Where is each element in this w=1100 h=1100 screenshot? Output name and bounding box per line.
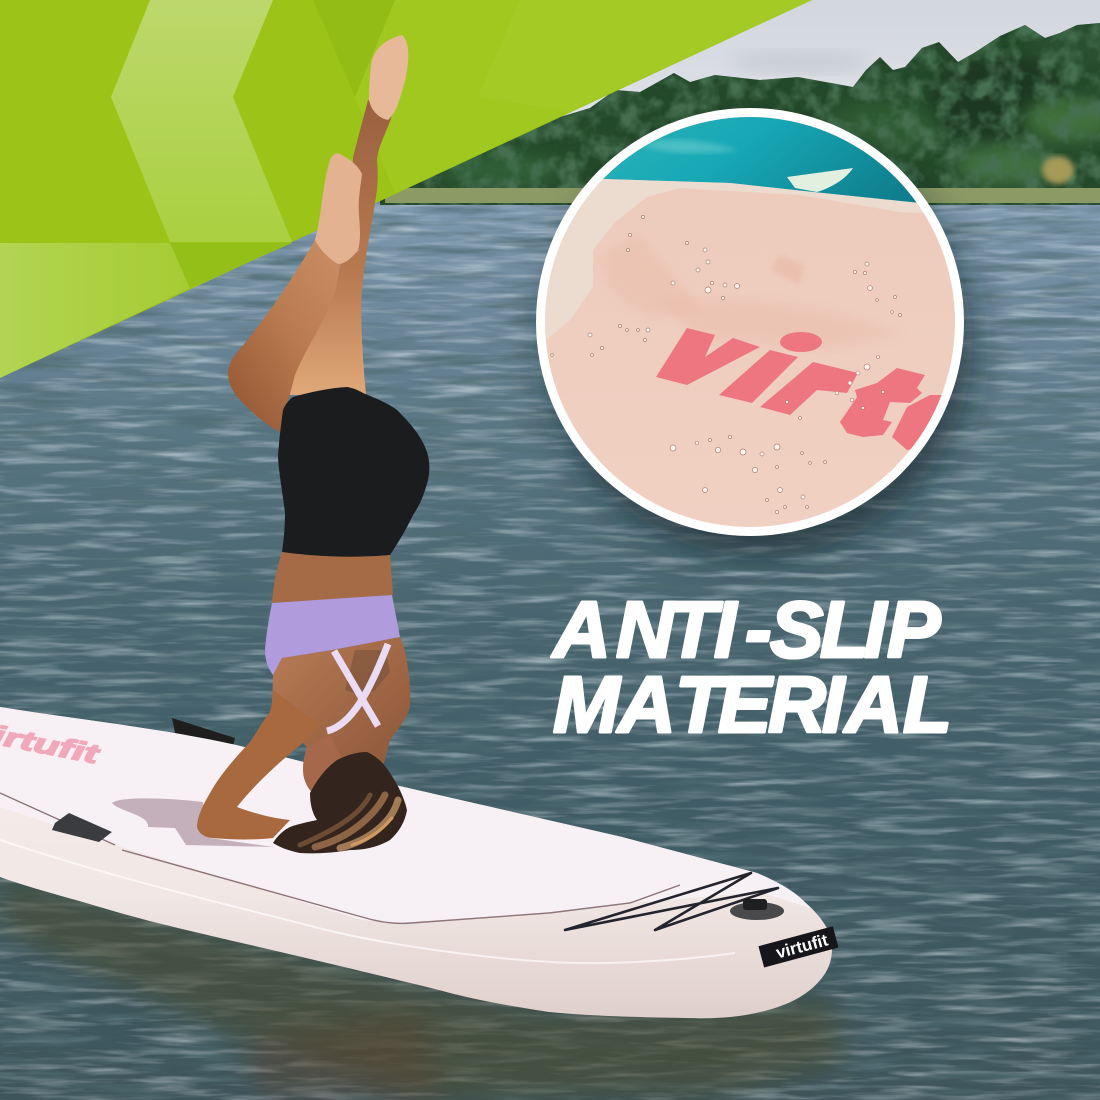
- back and shoulders: [272, 637, 410, 772]
- white cross straps: [327, 644, 388, 731]
- wet darker patches: [606, 240, 685, 316]
- droplets on logo: [786, 356, 884, 420]
- magnified material detail circle: [530, 100, 970, 550]
- green chevron banner: [0, 0, 812, 378]
- person shadow on deck: [112, 798, 274, 847]
- heading line 2: MATERIAL: [553, 660, 952, 749]
- board hull: [0, 707, 832, 1018]
- water droplets: [551, 215, 902, 514]
- dry pad band: [545, 179, 923, 340]
- lower foot: [315, 153, 362, 264]
- back tattoo: [345, 650, 390, 695]
- deck fitting: [730, 899, 784, 920]
- board side seam: [0, 840, 735, 963]
- teal light streaks: [640, 140, 740, 153]
- deck seam line: [0, 793, 680, 923]
- pink printed logo: [656, 328, 950, 450]
- pad surface: [545, 117, 955, 527]
- person doing a headstand: [197, 35, 429, 853]
- hair highlights: [300, 795, 398, 848]
- carry handle: [52, 813, 112, 842]
- raised straight leg: [285, 100, 392, 395]
- board deck pad: [0, 707, 810, 923]
- bungee cords: [565, 873, 778, 930]
- paddle board: [0, 707, 839, 1018]
- paddle blade behind the person: [172, 718, 235, 746]
- heading line 1: ANTI-SLIP: [551, 585, 941, 674]
- head: [303, 735, 345, 793]
- bent leg thigh and calf: [228, 240, 360, 432]
- black shorts: [278, 387, 429, 558]
- black brand tag: [758, 926, 839, 967]
- upper foot: [369, 35, 408, 120]
- black brand tag: virtufit: [774, 930, 830, 962]
- bare midriff: [272, 552, 393, 603]
- teal water in the detail: [603, 117, 917, 203]
- sky with clouds: [560, 0, 1100, 130]
- circle drop shadow: [548, 133, 972, 557]
- tree line on far shore: [380, 20, 1100, 205]
- left arm on board: [197, 690, 320, 840]
- lilac sports top: [265, 595, 400, 675]
- hair: [273, 752, 407, 853]
- heading: anti-slip material: [551, 585, 952, 749]
